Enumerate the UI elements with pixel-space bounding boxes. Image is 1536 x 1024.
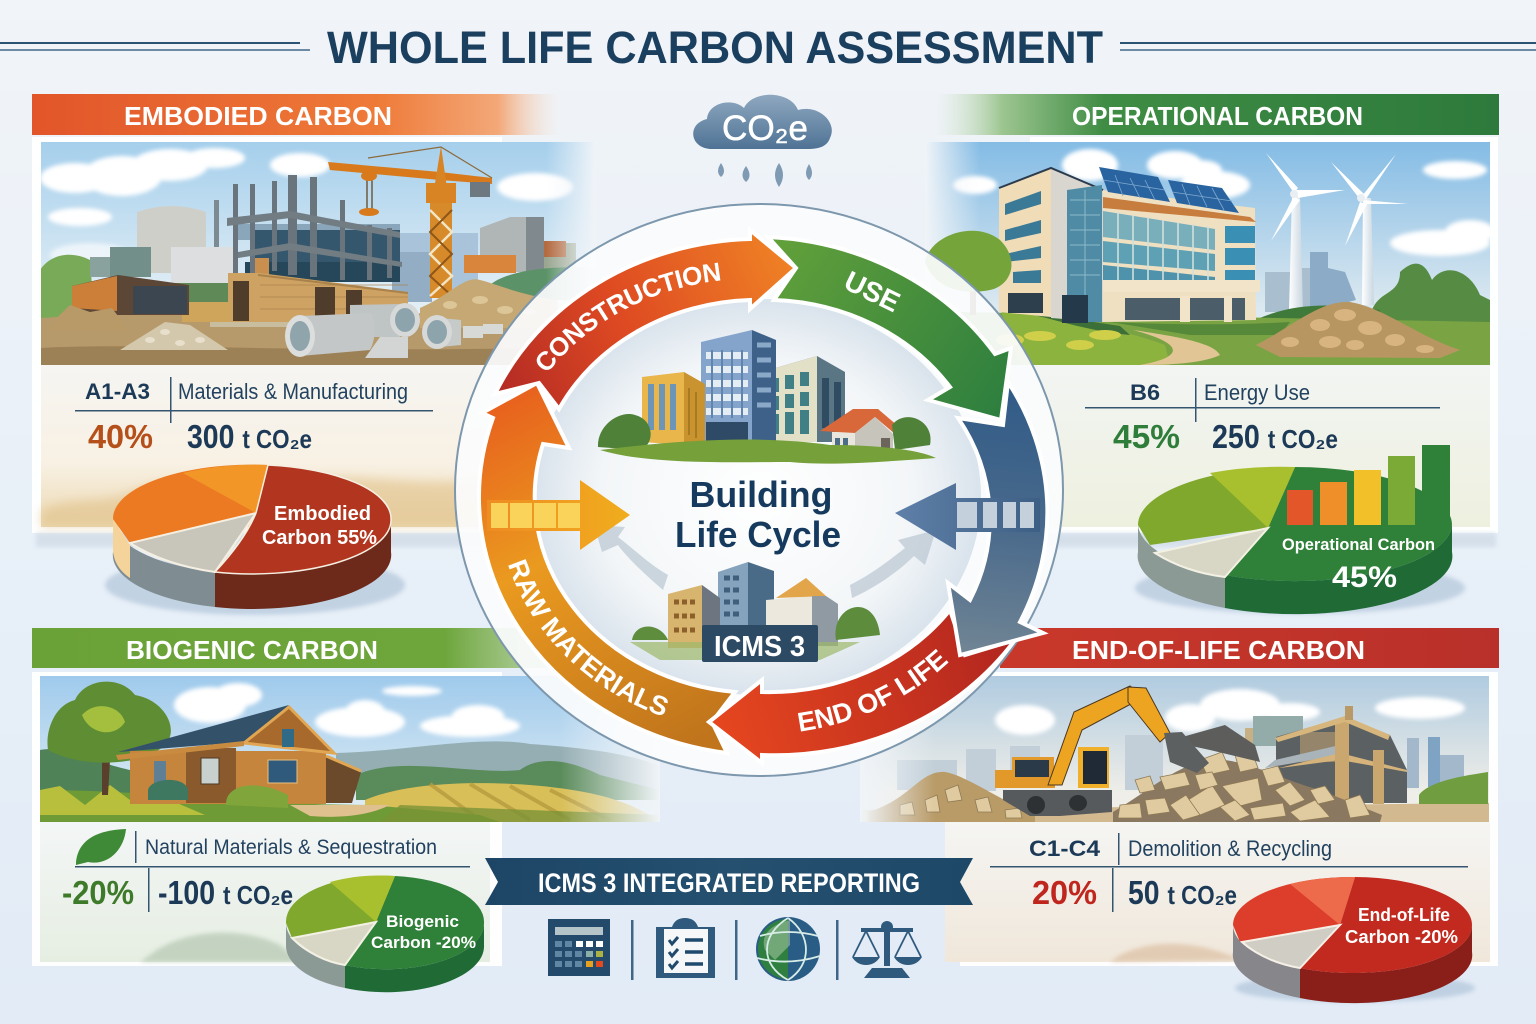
metric row: B6: 45% — [1113, 418, 1180, 455]
illustration: demolition site — [860, 676, 1489, 822]
illustration: upper building cluster — [598, 330, 936, 464]
icon: CO2e cloud — [693, 95, 832, 187]
arrow: blue inward — [895, 483, 1040, 550]
metric row: B6: Energy Use — [1204, 380, 1310, 405]
text: building life cycle: Building — [690, 474, 832, 515]
illustration: rubble — [868, 725, 1382, 822]
pie chart: embodied carbon 55%: Carbon 55% — [262, 527, 377, 549]
metric row: A1-A3: 300 t CO₂e — [187, 418, 312, 455]
pie chart: biogenic carbon -20%: Biogenic — [386, 912, 459, 931]
metric row: A1-A3: A1-A3 — [85, 379, 150, 404]
heading: operational carbon — [935, 94, 1499, 135]
icon: checklist clipboard — [656, 918, 715, 978]
pie chart: embodied carbon 55% — [105, 465, 405, 615]
badge: ICMS 3: ICMS 3 — [714, 631, 805, 663]
illustration: excavator — [995, 686, 1209, 816]
metric row: C1-C4: Demolition & Recycling — [1128, 836, 1332, 861]
pie chart: operational carbon 45% — [1135, 445, 1465, 614]
life cycle diagram — [454, 203, 1064, 777]
metric row: C1-C4: 20% — [1032, 874, 1097, 911]
illustration: brick building — [182, 258, 408, 327]
metric row: B6 — [1085, 378, 1440, 455]
illustration: construction site — [40, 142, 596, 365]
heading: operational carbon: OPERATIONAL CARBON — [1072, 101, 1363, 131]
icon: calculator — [548, 919, 610, 976]
title: WHOLE LIFE CARBON ASSESSMENT — [327, 22, 1103, 73]
pie chart: biogenic carbon -20% — [286, 875, 484, 992]
metric row: C1-C4 — [990, 833, 1468, 912]
panel: end-of-life carbon — [860, 628, 1499, 1003]
arrow: raw materials: RAW MATERIALS — [508, 559, 668, 715]
icon: leaf — [76, 829, 126, 865]
heading: biogenic carbon — [32, 628, 622, 668]
banner: ICMS 3 integrated reporting: ICMS 3 INTEGRATED REPORTING — [538, 868, 920, 898]
pie chart: biogenic carbon -20%: Carbon -20% — [371, 933, 476, 952]
panel: operational carbon — [925, 94, 1499, 614]
arrow: end of life — [706, 614, 1016, 759]
metric row: A1-A3: 40% — [88, 418, 153, 455]
metric row: natural materials — [62, 829, 470, 912]
arrow: construction: CONSTRUCTION — [536, 262, 720, 370]
pie chart: end-of-life carbon -20% — [1233, 877, 1475, 1003]
metric row: A1-A3 — [75, 377, 433, 455]
metric row: natural materials: Natural Materials & Sequestration — [145, 836, 437, 859]
panel: embodied carbon — [32, 94, 596, 615]
bar chart — [1287, 445, 1450, 525]
illustration: green office building — [925, 142, 1495, 365]
arrow: construction — [498, 234, 793, 412]
arrow: raw materials — [477, 386, 738, 750]
icon: globe — [756, 917, 820, 981]
arrow: end of life: END OF LIFE — [798, 648, 948, 732]
illustration: rock pile — [1256, 302, 1460, 358]
metric row: C1-C4: C1-C4 — [1029, 836, 1101, 861]
text: building life cycle: Life Cycle — [675, 514, 841, 555]
arrow: faint left — [594, 525, 668, 590]
arrow: blue return — [948, 382, 1047, 655]
pie chart: operational carbon 45%: 45% — [1332, 561, 1397, 594]
illustration: timber house — [116, 705, 361, 808]
arrow: use: USE — [840, 265, 905, 318]
pie chart: end-of-life carbon -20%: End-of-Life — [1358, 905, 1450, 925]
metric row: natural materials: -100 t CO₂e — [158, 874, 293, 911]
banner: ICMS 3 integrated reporting — [485, 858, 973, 905]
arrow: faint right — [850, 530, 936, 598]
arrow: use — [768, 237, 1011, 420]
metric row: natural materials: -20% — [62, 874, 134, 911]
icon: CO2e cloud: CO₂e — [722, 109, 808, 148]
panel: biogenic carbon — [32, 628, 667, 992]
illustration: lower building cluster — [630, 562, 880, 663]
heading: embodied carbon: EMBODIED CARBON — [124, 101, 392, 131]
pie chart: embodied carbon 55%: Embodied — [274, 503, 371, 525]
icon: tower crane — [328, 146, 492, 298]
heading: end-of-life carbon — [1000, 628, 1499, 668]
metric row: A1-A3: Materials & Manufacturing — [178, 379, 408, 404]
heading: embodied carbon — [32, 94, 562, 135]
building: red-roof house — [820, 409, 905, 458]
illustration: timber house and field — [40, 676, 667, 822]
illustration: damaged building — [1245, 706, 1407, 805]
illustration: tree — [925, 231, 1011, 315]
illustration: steel frame — [227, 175, 402, 282]
building: blue tower — [701, 330, 776, 442]
text: building life cycle — [675, 474, 841, 555]
building: yellow block — [642, 372, 705, 445]
illustration: concrete pipes — [285, 303, 503, 358]
illustration: office building — [999, 167, 1260, 323]
heading: end-of-life carbon: END-OF-LIFE CARBON — [1072, 635, 1365, 665]
illustration: tree — [47, 682, 171, 795]
heading: biogenic carbon: BIOGENIC CARBON — [126, 635, 378, 665]
arrow: yellow inward — [487, 480, 630, 550]
metric row: B6: 250 t CO₂e — [1212, 418, 1338, 455]
metric row: B6: B6 — [1130, 380, 1160, 405]
pie chart: end-of-life carbon -20%: Carbon -20% — [1345, 927, 1458, 947]
metric row: C1-C4: 50 t CO₂e — [1128, 874, 1237, 911]
pie chart: operational carbon 45%: Operational Carbon — [1282, 535, 1435, 554]
building: teal glass block — [765, 356, 845, 442]
icon: balance scales — [852, 921, 922, 978]
illustration: wind turbines — [1266, 153, 1408, 312]
